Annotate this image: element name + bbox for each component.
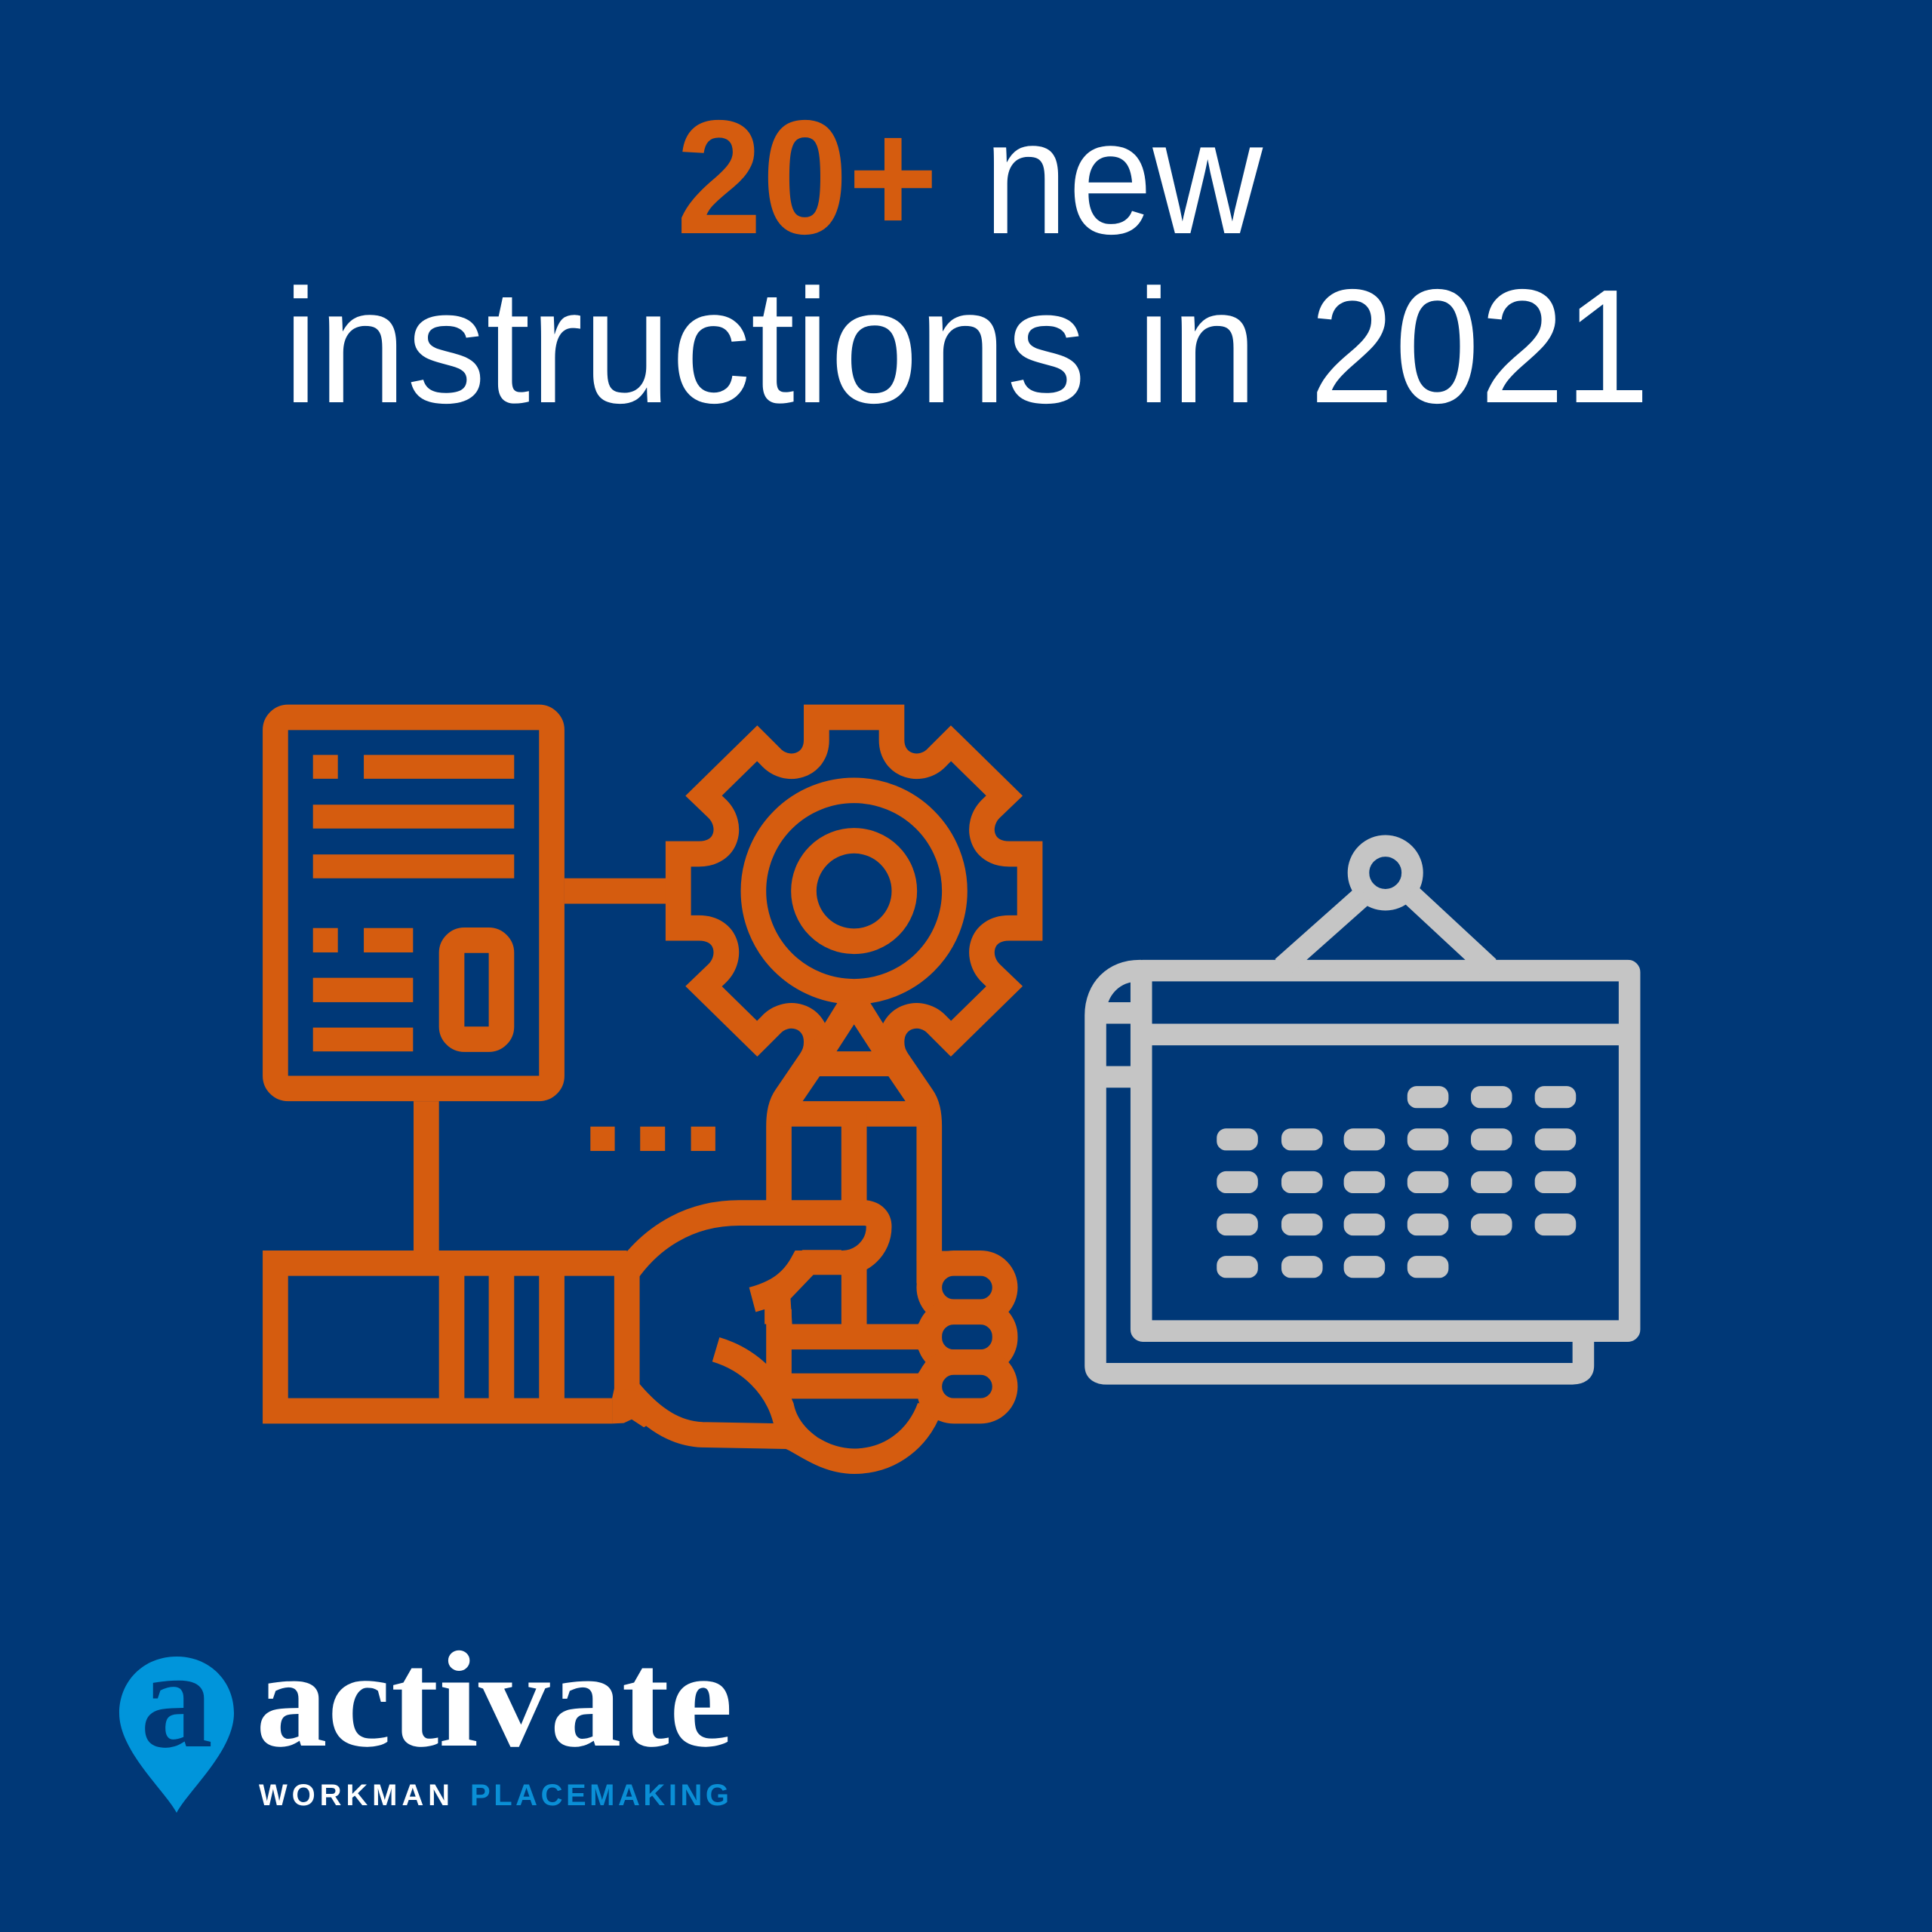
icon: document, gear, pencil and hand xyxy=(275,718,1030,1461)
logo xyxy=(119,1622,733,1813)
hand outline xyxy=(627,1213,930,1461)
title word: 2021: 2021 xyxy=(1309,255,1650,437)
connectors xyxy=(426,891,678,1254)
pencil base opening xyxy=(793,1399,915,1448)
title word: in: in xyxy=(1137,255,1257,437)
document small box xyxy=(452,940,501,1039)
calendar hanger xyxy=(1282,846,1489,968)
finger joint block xyxy=(916,1251,954,1420)
pencil tip xyxy=(779,1001,929,1127)
title xyxy=(283,86,1650,437)
logo pin letter: a xyxy=(140,1622,213,1777)
pencil centre line xyxy=(836,1114,872,1337)
sleeve xyxy=(275,1263,627,1411)
gear rings xyxy=(753,790,955,992)
palm lines xyxy=(716,1309,924,1420)
document outline xyxy=(275,718,552,1088)
dotted line xyxy=(590,1127,715,1151)
logo wordmark: activate xyxy=(256,1624,733,1776)
calendar front page xyxy=(1141,971,1629,1331)
fingers xyxy=(929,1263,1005,1411)
gear and pencil outline xyxy=(678,718,1030,1262)
highlighted number: 20+ xyxy=(676,86,938,268)
logo pin xyxy=(119,1657,234,1813)
title word: instructions: instructions xyxy=(283,255,1086,437)
title word: new: new xyxy=(983,86,1263,268)
logo tagline: workman: WORKMAN xyxy=(259,1779,450,1812)
palm to base join xyxy=(774,1413,829,1452)
icon: wall calendar xyxy=(1096,846,1629,1374)
logo tagline: placemaking: PLACEMAKING xyxy=(470,1779,729,1812)
thumb area xyxy=(749,1250,841,1324)
document text lines xyxy=(313,755,514,1051)
calendar back page xyxy=(1096,971,1583,1374)
calendar dates xyxy=(1217,1086,1576,1278)
calendar header line xyxy=(1141,1014,1629,1056)
wrist joint xyxy=(612,1389,660,1427)
